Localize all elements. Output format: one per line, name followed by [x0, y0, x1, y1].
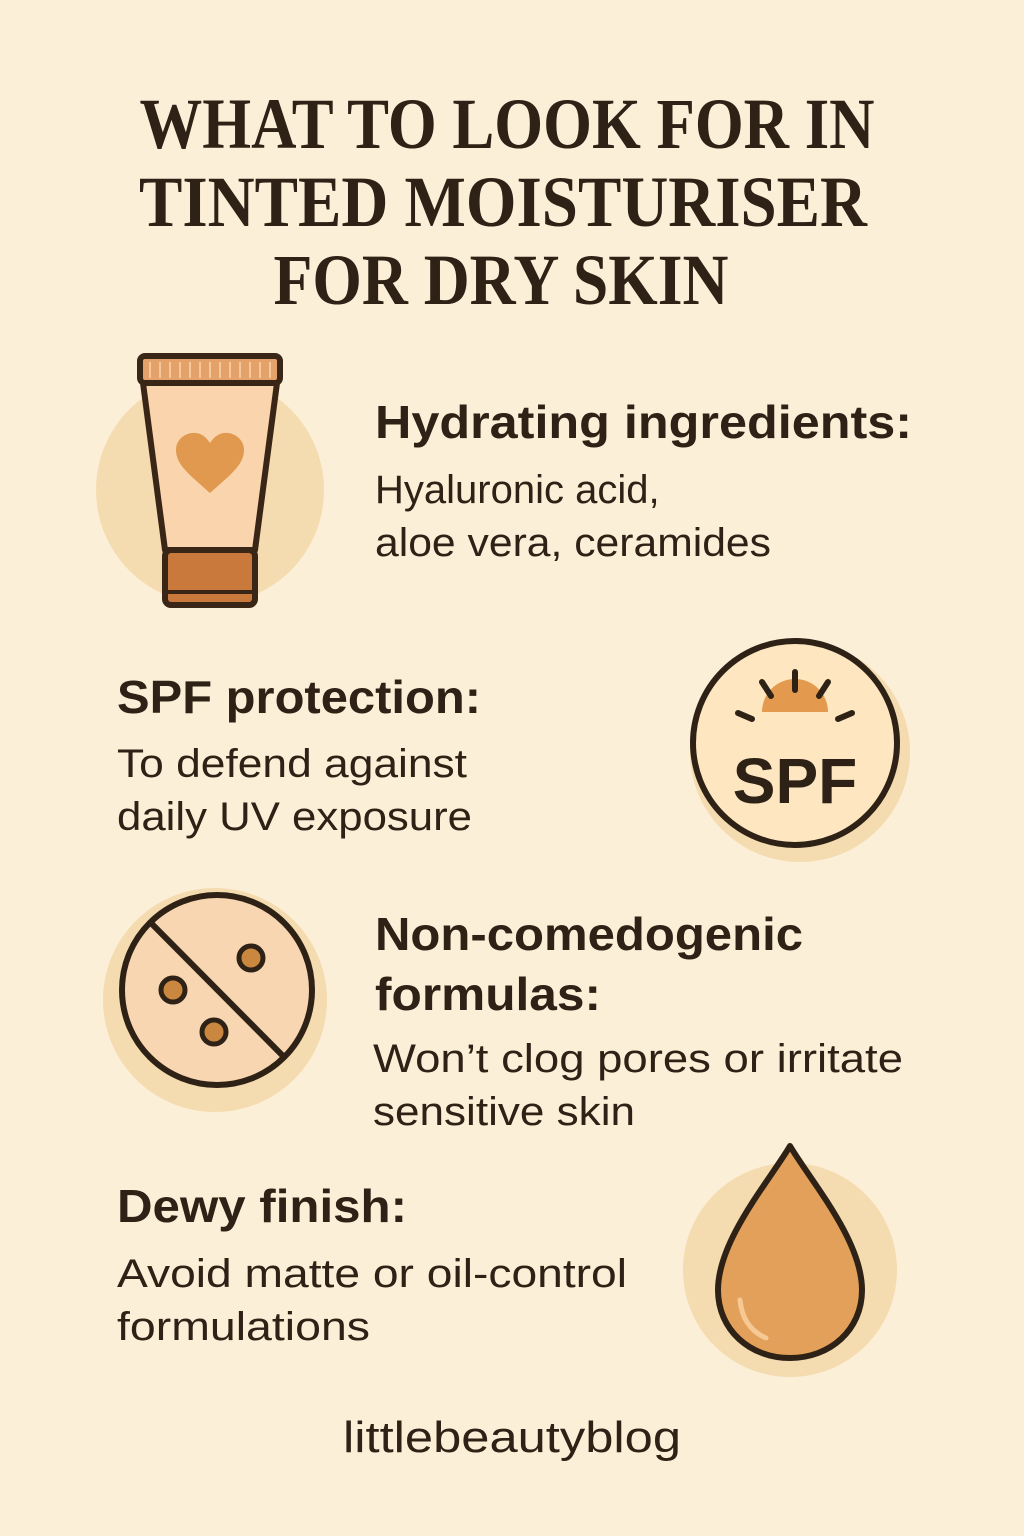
section: hydrating [375, 396, 912, 565]
icon: tube [96, 356, 324, 605]
section: hydrating: Hydrating ingredients: [375, 396, 912, 448]
section: non-comedogenic: Non-comedogenic [375, 908, 803, 960]
title: TINTED MOISTURISER [139, 162, 868, 242]
title [139, 84, 874, 320]
section: hydrating: aloe vera, ceramides [375, 521, 771, 565]
title: FOR DRY SKIN [274, 240, 729, 320]
section: dewy: formulations [117, 1305, 370, 1349]
section: non-comedogenic: sensitive skin [373, 1090, 635, 1134]
section: spf: SPF protection: [117, 671, 481, 723]
footer: littlebeautyblog [343, 1413, 681, 1462]
section: spf: daily UV exposure [117, 795, 472, 839]
section: non-comedogenic [373, 908, 903, 1134]
section: non-comedogenic: formulas: [375, 968, 601, 1020]
section: dewy: Dewy finish: [117, 1180, 407, 1232]
section: dewy [117, 1180, 627, 1349]
section: spf [117, 671, 481, 839]
section: spf: To defend against [117, 742, 467, 786]
icon: drop [683, 1146, 897, 1377]
icon: spf sun [690, 641, 910, 862]
icon: spf sun: SPF [733, 745, 857, 817]
section: hydrating: Hyaluronic acid, [375, 468, 660, 512]
icon: no pores [103, 888, 327, 1112]
section: non-comedogenic: Won’t clog pores or irritate [373, 1037, 903, 1081]
section: dewy: Avoid matte or oil-control [117, 1252, 627, 1296]
title: WHAT TO LOOK FOR IN [140, 84, 874, 164]
